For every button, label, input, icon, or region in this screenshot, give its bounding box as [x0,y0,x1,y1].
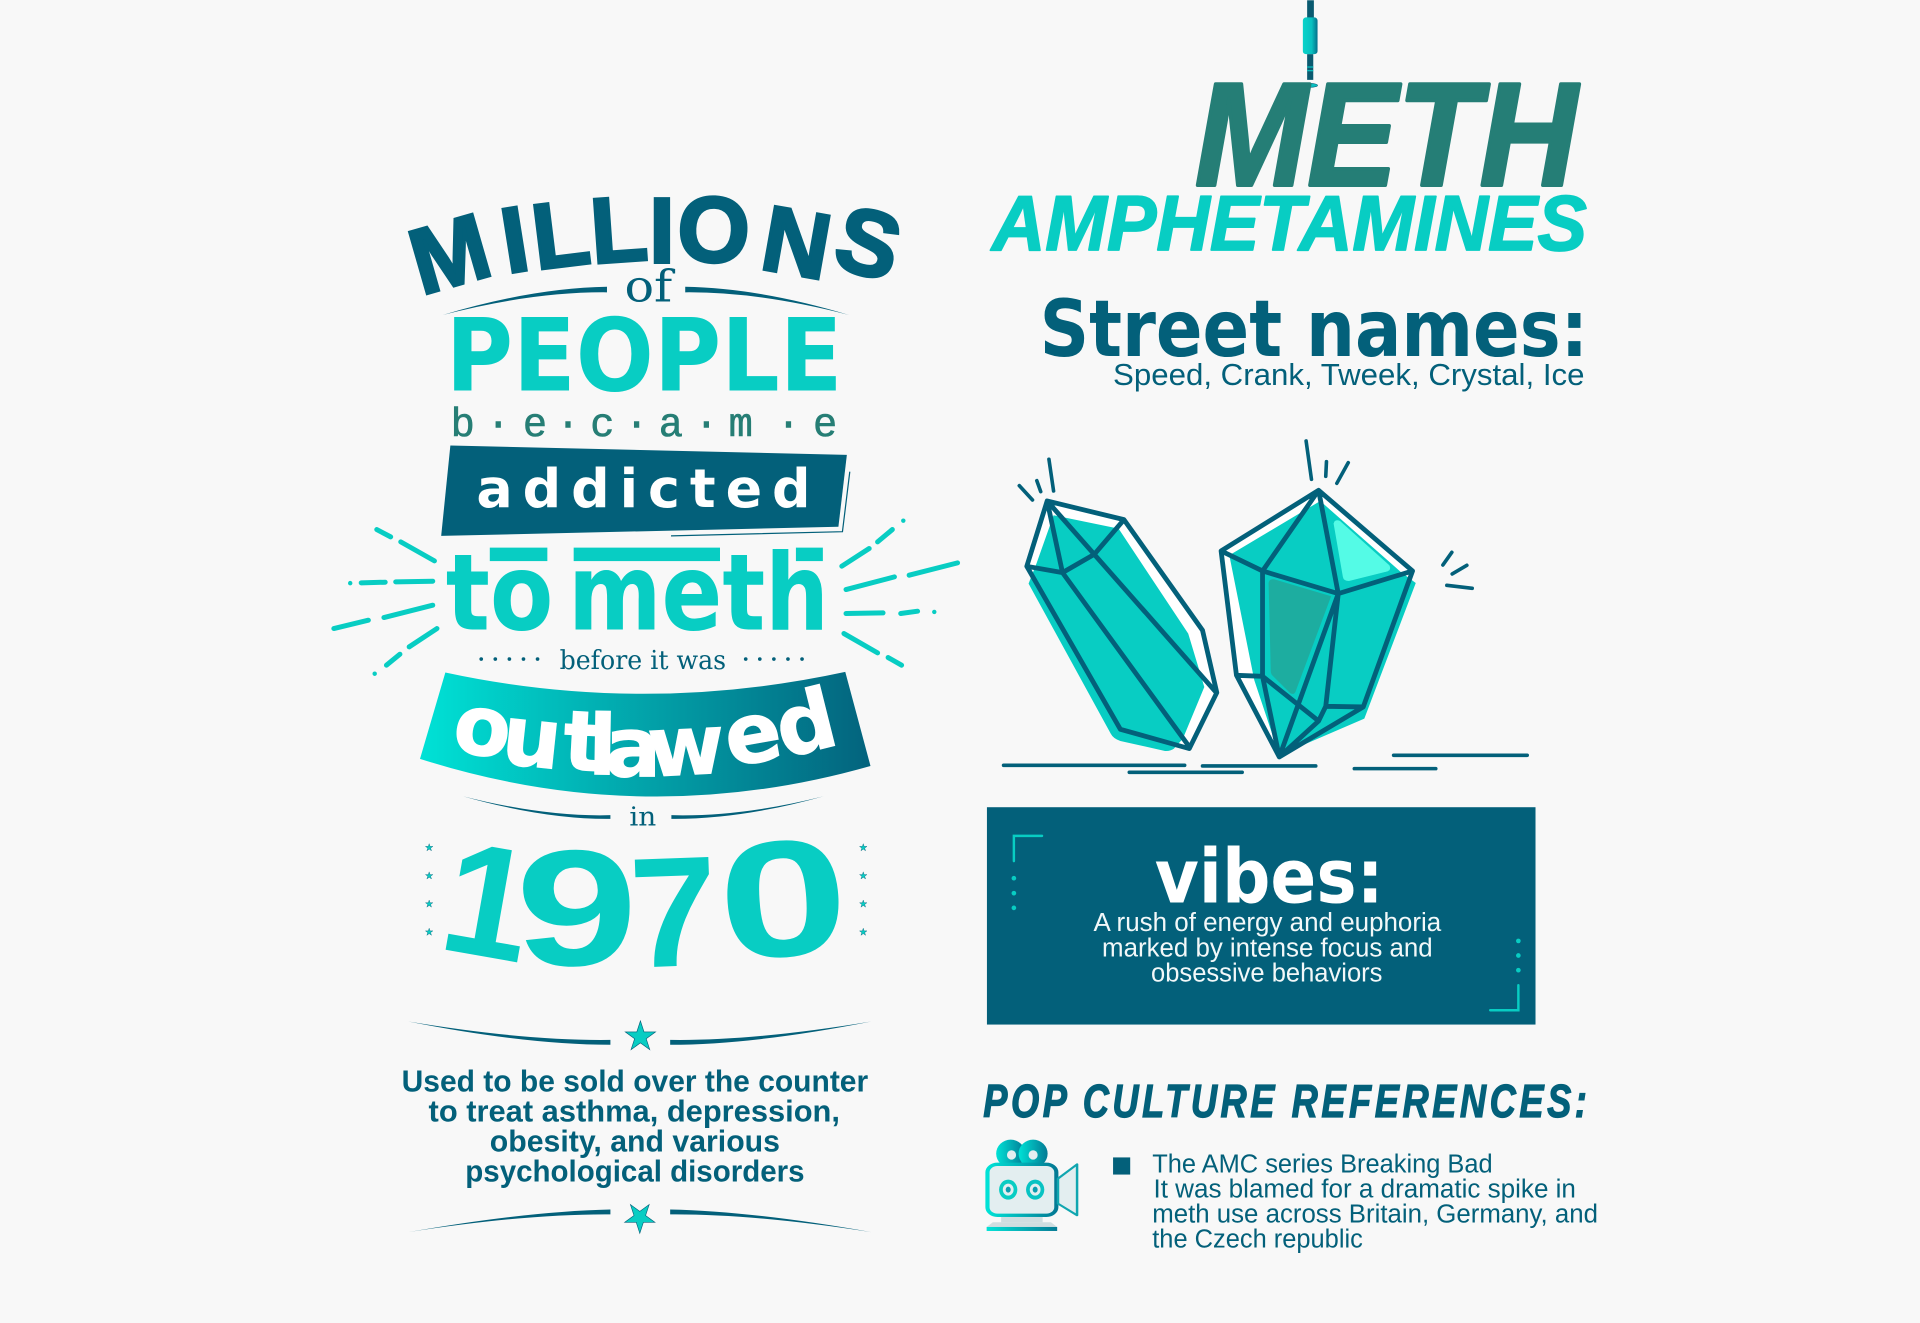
heading: vibes: vibes: [1155,834,1384,921]
pop culture description [1152,1151,1598,1253]
description text: to treat asthma, depression, [429,1094,840,1128]
icon: movie camera [987,1140,1077,1231]
vibes description: marked by intense focus and [1102,935,1433,963]
vibes description: obsessive behaviors [1151,959,1382,987]
title: METH: METH [1195,53,1580,217]
bottom divider with star [408,1205,871,1233]
panel: vibes [987,807,1536,1025]
top divider with star [408,1021,871,1050]
swoosh left of "of" [443,287,607,315]
word: in with swooshes [463,796,824,833]
heading: to meth with overbars: meth [568,532,829,656]
bullet square [1113,1157,1130,1175]
vibes description [1093,909,1442,987]
description text: obesity, and various [490,1124,780,1158]
year: 1970: 1 [430,807,546,997]
burst dots [348,518,936,676]
description text: psychological disorders [465,1154,804,1188]
heading: street names: Street names: [1040,284,1588,375]
year: 1970 [430,802,854,1002]
heading: to meth with overbars [446,532,829,656]
year: 1970: 0 [712,802,854,995]
crystal: right [1221,490,1416,757]
ground lines [1004,755,1527,772]
left column: millions of people headline [334,176,958,1233]
title: AMPHETAMINES: AMPHETAMINES [990,179,1587,267]
description text: Used to be sold over the counter [402,1064,868,1098]
year: 1970: 9 [516,816,638,1001]
decorative stars beside year [425,844,867,935]
panel dots [1012,876,1521,973]
street names list: Speed, Crank, Tweek, Crystal, Ice [1113,358,1584,392]
sparkle lines [1019,441,1472,588]
pop culture description: meth use across Britain, Germany, and [1152,1201,1598,1229]
hanging jack plug [1303,0,1318,87]
heading: to meth with overbars: to [446,532,553,656]
word: in with swooshes: in [629,803,656,833]
pop culture description: the Czech republic [1152,1225,1363,1253]
heading: MILLIONS: MILLIONS [398,176,912,315]
pop culture description: It was blamed for a dramatic spike in [1153,1176,1576,1204]
heading: pop culture references: POP CULTURE REFERENCES: [983,1075,1587,1127]
year: 1970: 7 [627,824,720,1002]
pop culture description: The AMC series Breaking Bad [1152,1151,1493,1179]
banner: addicted [441,446,850,536]
vibes description: A rush of energy and euphoria [1093,909,1442,937]
phrase: before it was [479,646,804,676]
heading: PEOPLE: PEOPLE [446,297,842,414]
corner bracket top left [1014,836,1042,861]
word: of: of [624,261,675,312]
corner bracket bottom right [1490,985,1518,1010]
banner: addicted: addicted [476,457,811,520]
crystal: left [1027,501,1217,751]
description text [402,1064,868,1188]
swoosh right of "of" [685,287,849,315]
banner: outlawed: outlawed [448,669,846,797]
phrase: before it was: before it was [560,646,726,676]
word: became: b·e·c·a·m·e [451,403,837,449]
crystals illustration [1004,441,1527,772]
burst rays around to meth [334,530,958,665]
